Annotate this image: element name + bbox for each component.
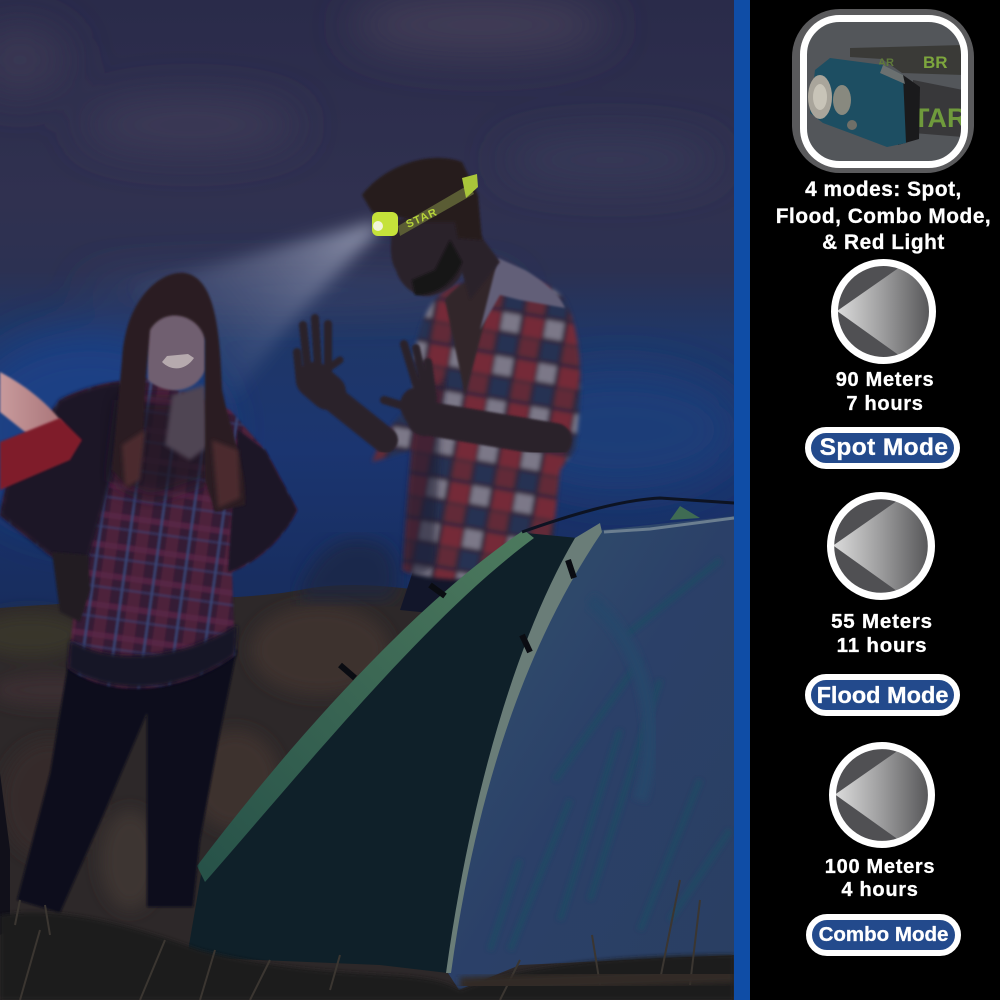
- caption: modes: [776, 178, 991, 254]
- stats: flood: 55 Meters: [831, 610, 933, 633]
- stats: flood: [831, 610, 933, 657]
- caption: modes: & Red Light: [822, 231, 945, 254]
- product thumbnail: headlamp: AR: [878, 57, 894, 69]
- stats: combo: 4 hours: [841, 879, 919, 901]
- stats: spot: 7 hours: [846, 392, 924, 414]
- photo: campers with headlamp at dusk: [0, 0, 734, 1000]
- product thumbnail: headlamp: [792, 9, 974, 173]
- woman: [0, 273, 297, 935]
- product thumbnail: headlamp: BR: [923, 53, 948, 72]
- woman's hair: [112, 273, 245, 512]
- man's hair: [362, 158, 482, 240]
- icon: combo beam: [829, 742, 935, 848]
- ground and grass: [0, 539, 734, 1000]
- man's arms and hands: [297, 318, 555, 440]
- headlamp light beam: [130, 222, 378, 400]
- label: spot mode: Spot Mode: [820, 434, 948, 461]
- label: combo mode: [806, 914, 961, 956]
- blue divider stripe: [734, 0, 750, 1000]
- lamp body: [898, 75, 920, 145]
- strap: [850, 45, 963, 75]
- stats: spot: 90 Meters: [836, 369, 934, 391]
- other person's arm: [0, 372, 64, 436]
- product thumbnail: headlamp: TAR: [913, 103, 966, 133]
- sky background: [0, 0, 740, 1000]
- caption: modes: 4 modes: Spot,: [805, 178, 962, 201]
- woman's face: [146, 303, 205, 390]
- stats: combo: [825, 856, 935, 901]
- label: flood mode: [805, 674, 960, 716]
- caption: modes: Flood, Combo Mode,: [776, 204, 991, 228]
- man's neck and face: [391, 205, 500, 300]
- man with headlamp: [297, 158, 580, 620]
- stats: spot: [836, 369, 934, 414]
- brand label on strap: STAR: [404, 206, 439, 231]
- headlamp on man: [372, 174, 478, 236]
- icon: flood beam: [827, 492, 935, 600]
- stats: flood: 11 hours: [837, 634, 927, 657]
- icon: spot beam: [831, 259, 936, 364]
- stats: combo: 100 Meters: [825, 856, 935, 878]
- label: flood mode: Flood Mode: [817, 682, 948, 708]
- tent: [187, 498, 734, 990]
- label: combo mode: Combo Mode: [819, 923, 948, 946]
- label: spot mode: [805, 427, 960, 469]
- foreground grass: [0, 880, 734, 1000]
